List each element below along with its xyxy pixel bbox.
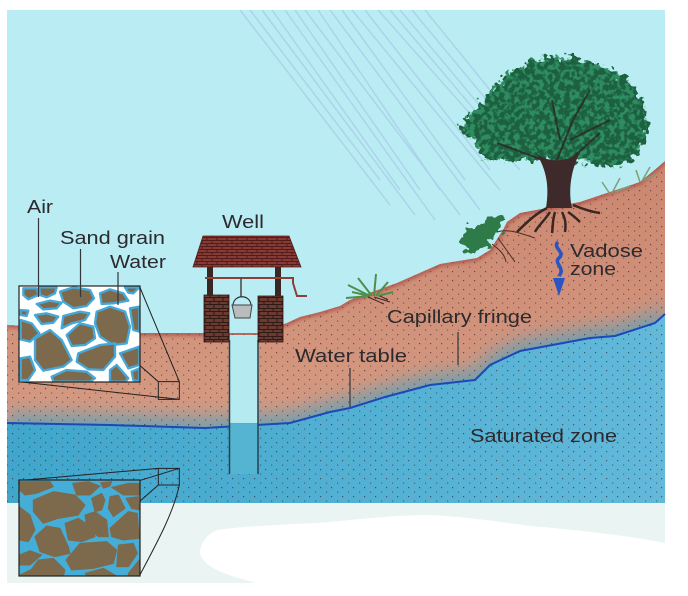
sand grains with water films: [21, 287, 139, 382]
sky background: [7, 10, 665, 350]
tree trunk: [535, 152, 580, 208]
tree roots: [517, 205, 600, 233]
soil top edge: [7, 161, 665, 333]
sand grains in water: [19, 482, 139, 576]
shrub roots: [492, 231, 535, 262]
label: Water: Water: [110, 252, 166, 272]
rope: [240, 278, 242, 297]
soil and water cross-section: [7, 150, 665, 510]
grass tuft: [346, 274, 393, 304]
leader lines: [38, 218, 458, 407]
axle and crank: [205, 278, 307, 296]
well shaft air: [230, 335, 258, 423]
well: [193, 236, 307, 474]
label: Vadose zone: [570, 241, 643, 279]
label: Vadose zone: zone: [570, 259, 616, 279]
inset: unsaturated sand: [18, 286, 179, 399]
roof posts: [210, 266, 278, 296]
label: Air: Air: [27, 197, 53, 217]
tree branches: [497, 90, 610, 160]
label: Sand grain: Sand grain: [60, 228, 165, 248]
label: Saturated zone: Saturated zone: [470, 426, 617, 446]
vadose soil: [7, 161, 665, 427]
capillary fringe: [7, 300, 665, 427]
pale lower band: [7, 500, 665, 583]
white blob: [200, 515, 665, 596]
label: Well: Well: [222, 212, 264, 232]
grass on hill: [602, 167, 656, 194]
tree canopy: [459, 57, 648, 168]
shrub: [460, 216, 505, 252]
roof: [193, 236, 301, 267]
left brick pillar: [204, 295, 229, 342]
rain streaks: [240, 10, 520, 220]
inset: saturated sand: [18, 468, 179, 576]
label: Water table: Water table: [295, 346, 407, 366]
right brick pillar: [258, 296, 283, 342]
label: Capillary fringe: Capillary fringe: [387, 307, 532, 327]
inset perspective lines: [18, 468, 179, 576]
tree: [459, 57, 648, 233]
water table line: [7, 314, 665, 428]
vadose arrow: [553, 242, 565, 296]
label: Vadose zone: Vadose: [570, 241, 643, 261]
inset perspective lines: [18, 286, 179, 399]
well shaft water: [230, 424, 258, 474]
saturated zone: [7, 314, 665, 503]
soil grains: [7, 150, 665, 503]
bucket: [232, 297, 252, 318]
